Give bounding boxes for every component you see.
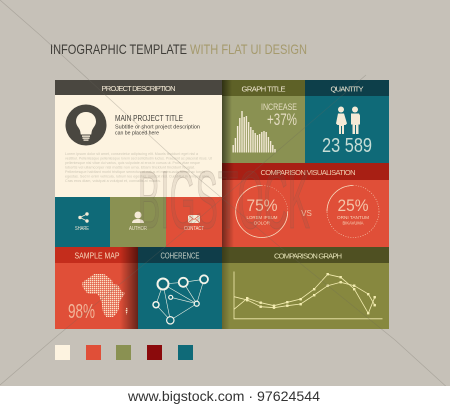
- panel: project description: [55, 80, 222, 197]
- icon: person: [132, 212, 144, 223]
- lorem ipsum text block: Lorem ipsum dolor sit amet, consectetur adipiscing elit. Mauris tincidunt eget nisl a: [65, 151, 199, 156]
- tile: share: SHARE: [75, 226, 90, 232]
- project title text: MAIN PROJECT TITLE: [115, 114, 183, 123]
- tile: contact: [166, 197, 222, 247]
- heading: project description: PROJECT DESCRIPTION: [102, 84, 176, 93]
- lorem ipsum text block: vestibul. Pellentesque pellentesque lorem sed sollicitudin luctus. Praesent ac placerat risus. Ut: [65, 156, 213, 160]
- lorem ipsum text block: lobortis vel ullamcorper nisi mattis non urna. Etiam tincidunt tincidunt feugiat.: [65, 164, 195, 170]
- tile: share: [55, 197, 110, 247]
- title: INFOGRAPHIC TEMPLATE: [50, 41, 187, 57]
- project title text: can be placed here: [115, 130, 159, 136]
- lorem ipsum text block: [65, 151, 213, 183]
- colour swatches: [55, 345, 193, 360]
- lorem ipsum text block: egestas. Sed in enim vehicula, rutrum leo egestas, suscipit nisi. Curabitur in tempus arcu.: [65, 174, 210, 178]
- panel: sample map: [55, 247, 138, 329]
- histogram: [232, 111, 276, 152]
- panel: comparison graph: [222, 247, 389, 329]
- lorem ipsum text block: pellentesque nisi vitae dui varius, quis vulputate at eros in cursus ut. Proin vitae neque: [65, 160, 201, 165]
- heading: comparison graph: COMPARISON GRAPH: [274, 252, 342, 260]
- chart: 75 percent ring: 75%: [246, 197, 278, 215]
- chart: 75 percent ring: DOLOR: [254, 220, 271, 226]
- increase stat: +37%: [267, 111, 297, 129]
- project title text: Subtitle or short project description: [115, 124, 200, 130]
- chart: 75 percent ring: [236, 186, 288, 238]
- heading: sample map: SAMPLE MAP: [74, 252, 120, 260]
- network diagram: [153, 275, 208, 324]
- footer strip: www.bigstock.com · 97624544: [127, 389, 321, 404]
- project title text: [115, 114, 200, 136]
- tile: contact: CONTACT: [184, 226, 204, 232]
- label: versus: VS: [301, 209, 312, 218]
- map: dotted Africa: [82, 274, 128, 317]
- chart: 75 percent ring: LOREM IPSUM: [246, 215, 278, 220]
- panel: quantity: [305, 80, 389, 163]
- icon: share: [79, 213, 88, 222]
- heading: graph title: GRAPH TITLE: [242, 84, 286, 94]
- increase stat: [261, 102, 297, 129]
- heading: quantity: QUANTITY: [330, 84, 364, 94]
- title: [50, 41, 307, 57]
- tile: author: [110, 197, 166, 247]
- map percent: 98%: [68, 301, 95, 323]
- chart: 25 percent ring: 25%: [338, 197, 369, 215]
- heading: coherence: COHERENCE: [160, 252, 200, 260]
- footer strip: [0, 386, 450, 406]
- icon: light bulb: [66, 104, 106, 146]
- panel: coherence: [138, 247, 222, 329]
- chart: 25 percent ring: ORNI TANTUM: [337, 215, 369, 220]
- line chart: [234, 272, 382, 319]
- icon: woman and man: [336, 106, 360, 134]
- lorem ipsum text block: Pellentesque habitant morbi tristique senectus et netus et malesuada fames ac turpis: [65, 169, 205, 174]
- title: WITH FLAT UI DESIGN: [190, 41, 307, 57]
- lorem ipsum text block: Cras eros diam, volutpat a volutpat et, convallis at mauris.: [65, 178, 161, 183]
- quantity number: 23 589: [322, 135, 372, 157]
- heading: comparison visualisation: COMPARISON VISUALISATION: [260, 168, 356, 177]
- tile: author: AUTHOR: [129, 226, 147, 232]
- icon: envelope: [188, 215, 200, 223]
- panel: graph title: [222, 80, 305, 163]
- panel: comparison visualisation: [222, 163, 389, 247]
- chart: 25 percent ring: [327, 186, 379, 238]
- increase stat: INCREASE: [261, 102, 297, 113]
- chart: 25 percent ring: BIKAVUMA: [342, 220, 364, 226]
